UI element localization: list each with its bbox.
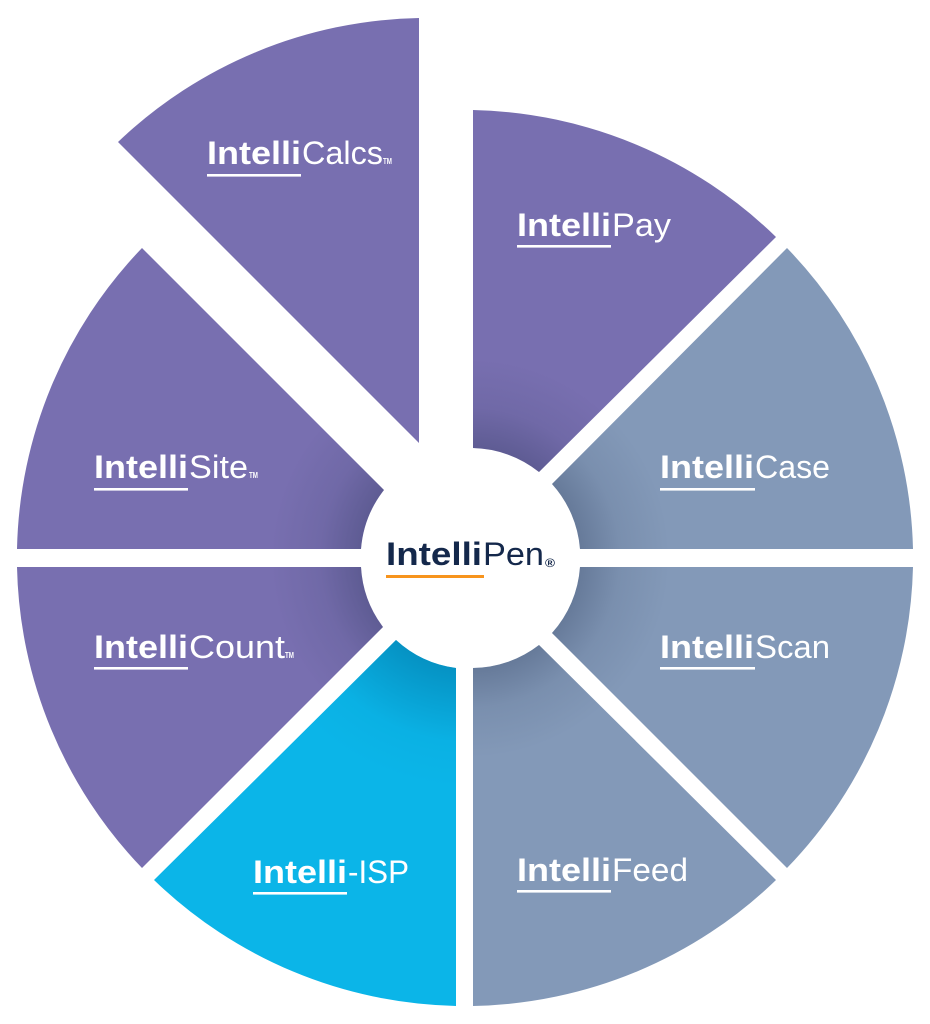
label: IntelliCalcs bbox=[207, 135, 392, 177]
label: IntelliPay: Pay bbox=[612, 207, 671, 243]
center label: IntelliPen: Pen bbox=[483, 536, 544, 572]
label: IntelliPay: Intelli bbox=[517, 207, 611, 243]
wedge: IntelliCount bbox=[17, 567, 383, 868]
label: IntelliCount: Count bbox=[189, 629, 285, 665]
label: IntelliCalcs: Calcs bbox=[302, 135, 383, 171]
label: IntelliCount: Intelli bbox=[94, 629, 188, 665]
label: Intelli-ISP: Intelli bbox=[253, 854, 347, 890]
label: IntelliFeed: Intelli bbox=[517, 852, 611, 888]
wedge: IntelliFeed bbox=[473, 645, 776, 1006]
label: IntelliCount: TM bbox=[285, 651, 294, 660]
label: IntelliCount bbox=[94, 629, 294, 670]
label: IntelliFeed bbox=[517, 852, 688, 893]
center label: IntelliPen bbox=[386, 536, 555, 578]
label: IntelliCalcs: Intelli bbox=[207, 135, 301, 171]
label: IntelliScan: Intelli bbox=[660, 629, 754, 665]
label: IntelliPay bbox=[517, 207, 671, 248]
center label: IntelliPen: Intelli bbox=[386, 536, 482, 572]
label: IntelliSite bbox=[94, 449, 258, 491]
label: IntelliFeed: Feed bbox=[612, 852, 688, 888]
wedge: IntelliCalcs bbox=[118, 18, 419, 443]
label: IntelliCalcs: TM bbox=[383, 157, 392, 166]
label: IntelliCase: Case bbox=[755, 449, 830, 485]
wedge: IntelliSite bbox=[17, 248, 384, 549]
label: Intelli-ISP: -ISP bbox=[348, 854, 409, 890]
label: IntelliScan: Scan bbox=[755, 629, 830, 665]
label: Intelli-ISP bbox=[253, 854, 409, 895]
wedge: Intelli-ISP bbox=[154, 640, 456, 1006]
label: IntelliSite: TM bbox=[249, 471, 258, 480]
label: IntelliSite: Site bbox=[189, 449, 248, 485]
wedge: IntelliPay bbox=[473, 110, 776, 472]
label: IntelliCase bbox=[660, 449, 830, 491]
label: IntelliSite: Intelli bbox=[94, 449, 188, 485]
label: IntelliCase: Intelli bbox=[660, 449, 754, 485]
label: IntelliScan bbox=[660, 629, 830, 670]
wedge: IntelliCase bbox=[552, 248, 913, 549]
center label: IntelliPen: ® bbox=[545, 556, 555, 570]
wedge: IntelliScan bbox=[552, 567, 913, 868]
